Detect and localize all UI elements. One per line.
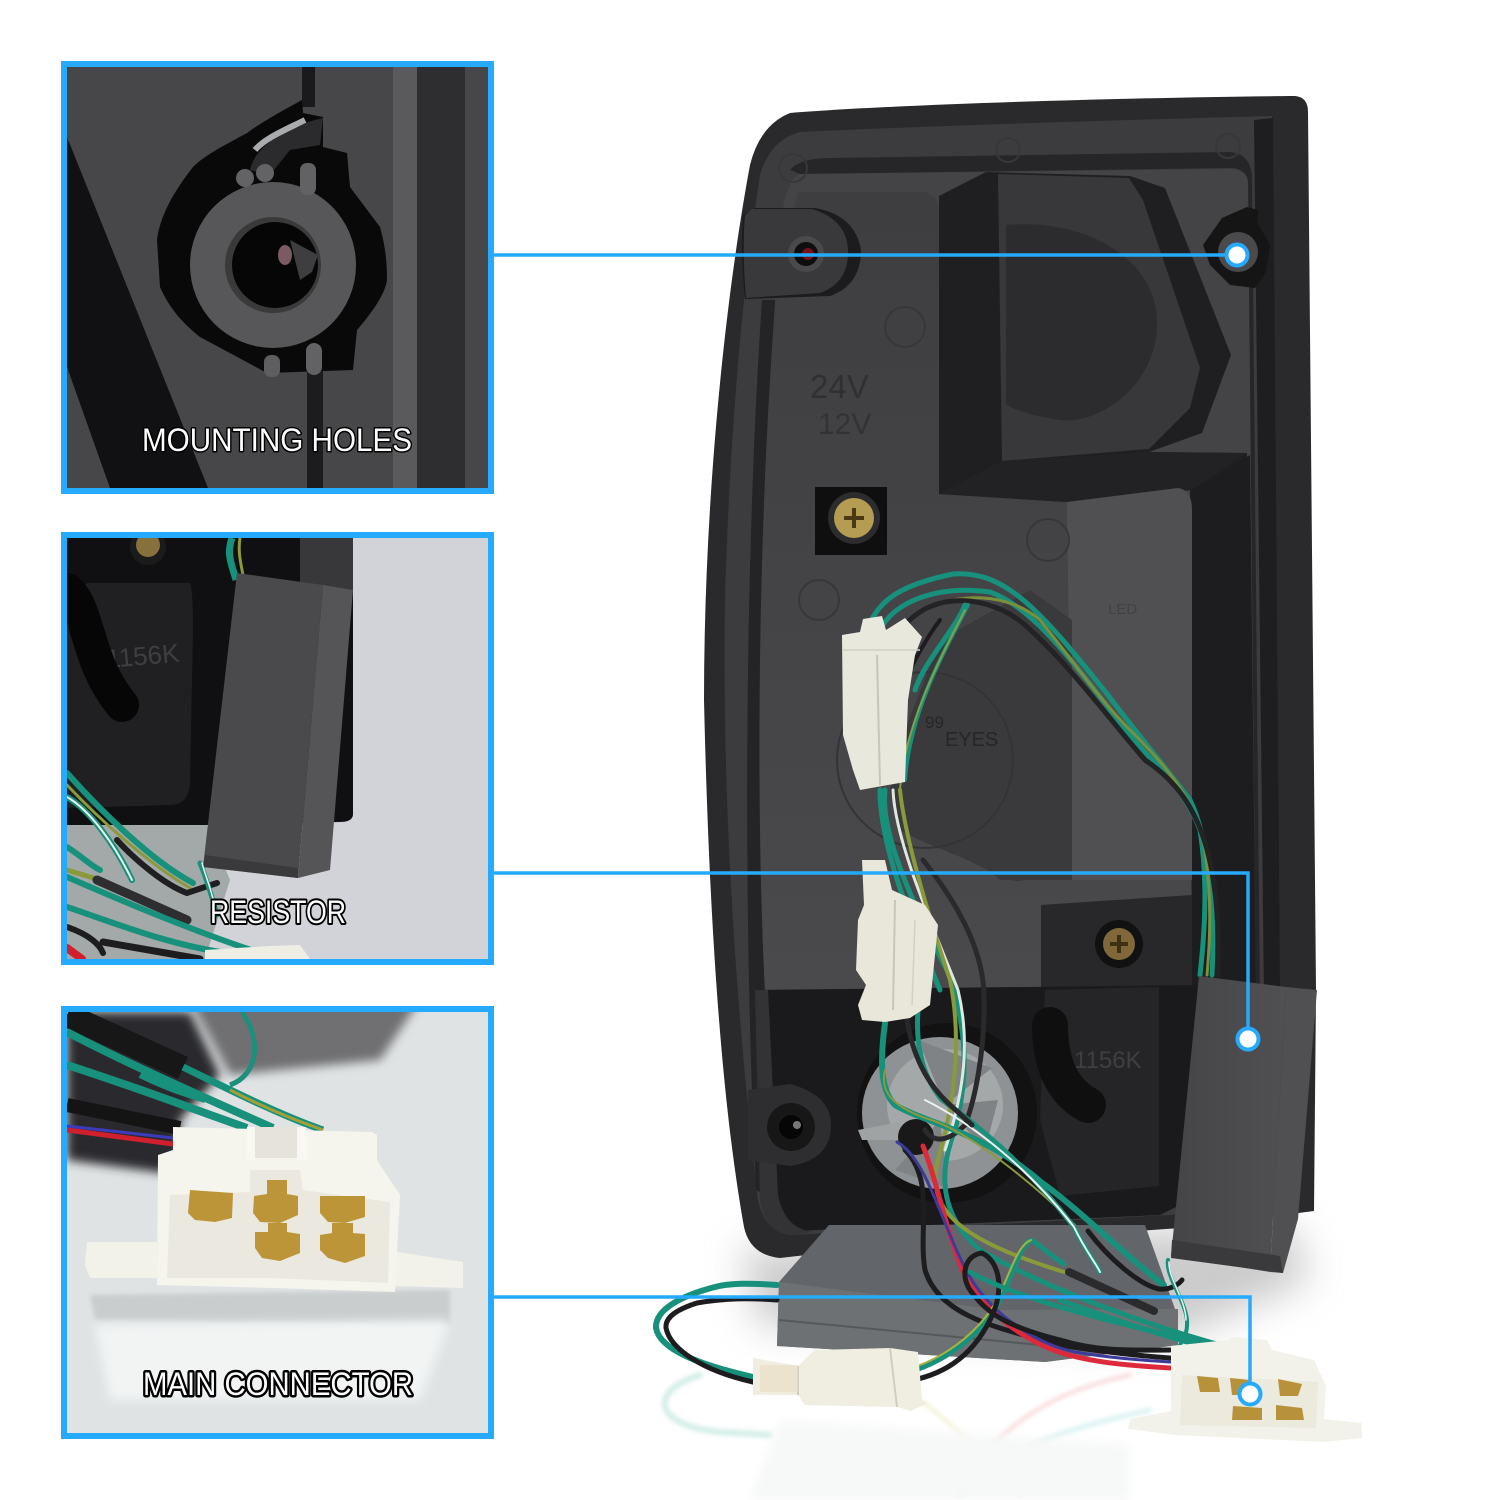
housing outer shell — [704, 96, 1316, 1258]
left rail dark line — [747, 300, 780, 1200]
panel: main connector — [61, 1000, 494, 1439]
lower screw — [1095, 920, 1143, 968]
leader line: mounting holes — [494, 244, 1248, 266]
bottom left white connector — [753, 1348, 928, 1411]
wiring harness — [656, 574, 1220, 1382]
red and blue wires — [923, 1146, 1170, 1368]
embossed led text: LED — [1108, 601, 1137, 618]
dark eyes badge recess — [890, 590, 1072, 880]
embossed voltage text: 24V — [810, 368, 869, 405]
top-left tab — [742, 208, 861, 299]
panel: resistor — [61, 529, 494, 965]
connector tabs — [85, 1242, 157, 1278]
embossed eyes text: 99 — [925, 713, 944, 732]
left loop — [656, 1284, 777, 1377]
housing rim band — [725, 116, 1278, 1235]
resistor block closeup — [203, 573, 323, 878]
panel photo background — [67, 67, 393, 488]
upper loop wires — [869, 574, 1213, 975]
connector body — [157, 1127, 400, 1292]
panel: mounting holes — [61, 61, 494, 494]
panel photo background — [67, 1012, 488, 1433]
reflector ring — [998, 174, 1200, 461]
panel: resistor: 1156K — [105, 638, 181, 674]
lower step — [1041, 895, 1192, 990]
socket wires — [882, 1023, 1164, 1285]
tail light assembly — [665, 96, 1316, 1500]
upper white connector — [842, 616, 922, 790]
upper face of block — [939, 452, 1247, 502]
left edge rail lower — [755, 990, 815, 1235]
lower black recess — [755, 985, 1200, 1231]
right recess strip — [1192, 455, 1256, 990]
panel label: resistor: RESISTOR — [210, 894, 346, 930]
upper screw — [815, 487, 887, 555]
tail light assembly: EYES — [945, 729, 998, 751]
bulb socket — [857, 1023, 1037, 1203]
leader line: main connector — [494, 1297, 1260, 1404]
panel photo background — [207, 538, 488, 959]
bottom right main connector — [1128, 1337, 1362, 1442]
bottom-left mounting hole — [748, 1084, 831, 1166]
raised body panel — [759, 192, 1192, 990]
resistor block — [1171, 976, 1317, 1273]
flat grey base — [777, 1225, 1178, 1362]
front face of block — [1067, 488, 1192, 880]
black lower wire — [905, 1150, 1170, 1358]
lower grey base — [67, 825, 230, 959]
leader line: resistor — [494, 873, 1258, 1050]
embossed circles — [779, 134, 1240, 880]
top-right mounting hole — [1203, 207, 1270, 288]
soft drop shadow — [740, 1225, 1310, 1340]
black reflector band — [939, 172, 1252, 990]
embossed bulb text: 1156K — [1074, 1047, 1142, 1074]
panel label: main connector: MAIN CONNECTOR — [143, 1366, 413, 1402]
bulb side grip — [1050, 1025, 1088, 1105]
connector lead wires — [909, 1240, 1064, 1372]
inner recess — [760, 169, 1256, 990]
floor reflection — [665, 1375, 1150, 1495]
reflector inner D — [1006, 224, 1157, 420]
central bundle — [884, 790, 1220, 1345]
top rim dark groove — [790, 152, 1260, 1000]
brass terminals — [188, 1180, 365, 1263]
panel label: mounting holes: MOUNTING HOLES — [142, 422, 412, 458]
right short wire — [1168, 1260, 1187, 1345]
lower white connector — [856, 860, 938, 1022]
tail light assembly: 12V — [818, 408, 871, 441]
